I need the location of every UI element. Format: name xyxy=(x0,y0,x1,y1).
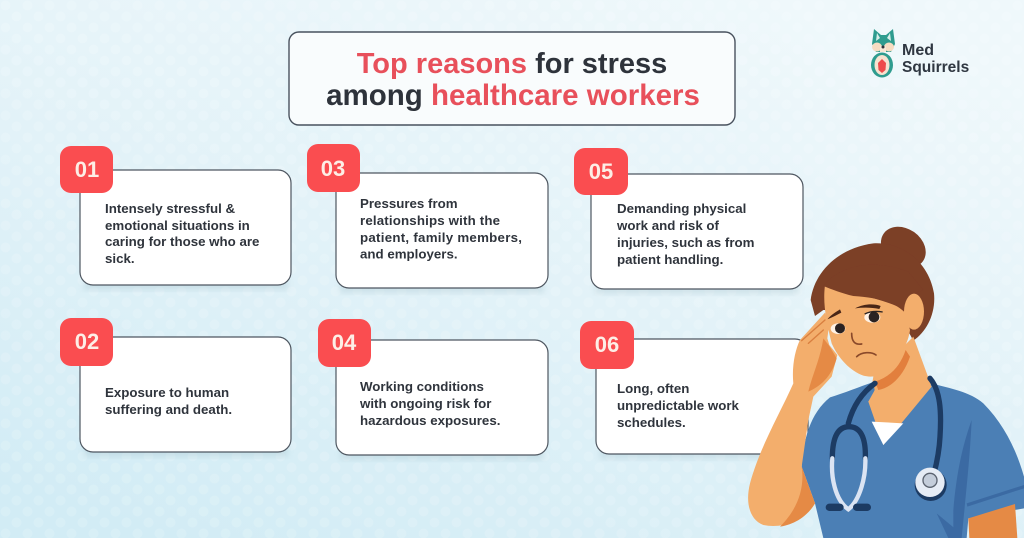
text 06: unpredictable work xyxy=(617,398,740,413)
text 06: schedules. xyxy=(617,415,686,430)
text 01: caring for those who are xyxy=(105,234,259,249)
title text: among healthcare workers xyxy=(326,79,700,112)
card 06 xyxy=(580,321,808,454)
text 05: work and risk of xyxy=(616,218,720,233)
badge 06: 06 xyxy=(595,332,619,357)
card 03 xyxy=(307,144,548,288)
text 04 xyxy=(359,379,500,428)
badge 03: 03 xyxy=(321,156,345,181)
arm shading xyxy=(780,338,837,527)
neck shadow xyxy=(875,350,910,390)
logo text: Med xyxy=(902,42,934,59)
ear xyxy=(904,294,924,330)
fingers xyxy=(802,320,825,343)
chest piece xyxy=(915,468,947,501)
text 02: Exposure to human xyxy=(105,385,229,400)
hair bun xyxy=(873,218,934,276)
text 06 xyxy=(617,381,740,430)
front hair xyxy=(823,265,923,313)
card 05 xyxy=(574,148,803,289)
text 03: patient, family members, xyxy=(360,230,522,245)
card 01 xyxy=(60,146,291,285)
nurse illustration xyxy=(748,218,1024,538)
text 05 xyxy=(616,201,754,267)
text 01: sick. xyxy=(105,251,135,266)
icon: squirrel mascot xyxy=(871,29,895,78)
mouth and nose xyxy=(852,333,876,357)
eyes xyxy=(831,311,883,334)
title text xyxy=(326,48,700,112)
badge 06 xyxy=(580,321,634,369)
text 04: Working conditions xyxy=(360,379,484,394)
badge 05 xyxy=(574,148,628,195)
logo text xyxy=(902,42,969,76)
badge 01: 01 xyxy=(75,157,99,182)
neck xyxy=(868,337,932,445)
eyebrows xyxy=(827,304,881,319)
text 05: injuries, such as from xyxy=(617,235,754,250)
face xyxy=(824,285,910,377)
title panel xyxy=(289,32,735,125)
text 01 xyxy=(105,201,259,266)
title text: Top reasons for stress xyxy=(357,48,667,80)
right arm xyxy=(968,504,1017,538)
logo text: Squirrels xyxy=(902,59,969,76)
back hair xyxy=(811,243,934,341)
badge 04: 04 xyxy=(332,330,357,355)
text 05: Demanding physical xyxy=(617,201,746,216)
text 04: with ongoing risk for xyxy=(359,396,491,411)
card 04 xyxy=(318,319,548,455)
badge 04 xyxy=(318,319,371,367)
text 02 xyxy=(105,385,232,417)
text 02: suffering and death. xyxy=(105,402,232,417)
badge 01 xyxy=(60,146,113,193)
neck opening xyxy=(868,357,932,445)
text 05: patient handling. xyxy=(617,252,723,267)
badge 02 xyxy=(60,318,113,366)
text 03 xyxy=(360,196,522,262)
logo: Med Squirrels xyxy=(871,29,969,78)
text 01: Intensely stressful & xyxy=(105,201,235,216)
badge 03 xyxy=(307,144,360,192)
badge 02: 02 xyxy=(75,329,99,354)
text 03: Pressures from xyxy=(360,196,458,211)
undershirt xyxy=(872,422,903,445)
stethoscope xyxy=(829,378,941,509)
text 03: relationships with the xyxy=(360,213,500,228)
card 02 xyxy=(60,318,291,452)
scrub shading xyxy=(937,420,1024,538)
text 01: emotional situations in xyxy=(105,218,250,233)
scrubs xyxy=(802,382,1024,538)
text 04: hazardous exposures. xyxy=(360,413,500,428)
badge 05: 05 xyxy=(589,159,613,184)
raised arm and hand xyxy=(748,313,837,526)
text 06: Long, often xyxy=(617,381,689,396)
text 03: and employers. xyxy=(360,246,458,262)
